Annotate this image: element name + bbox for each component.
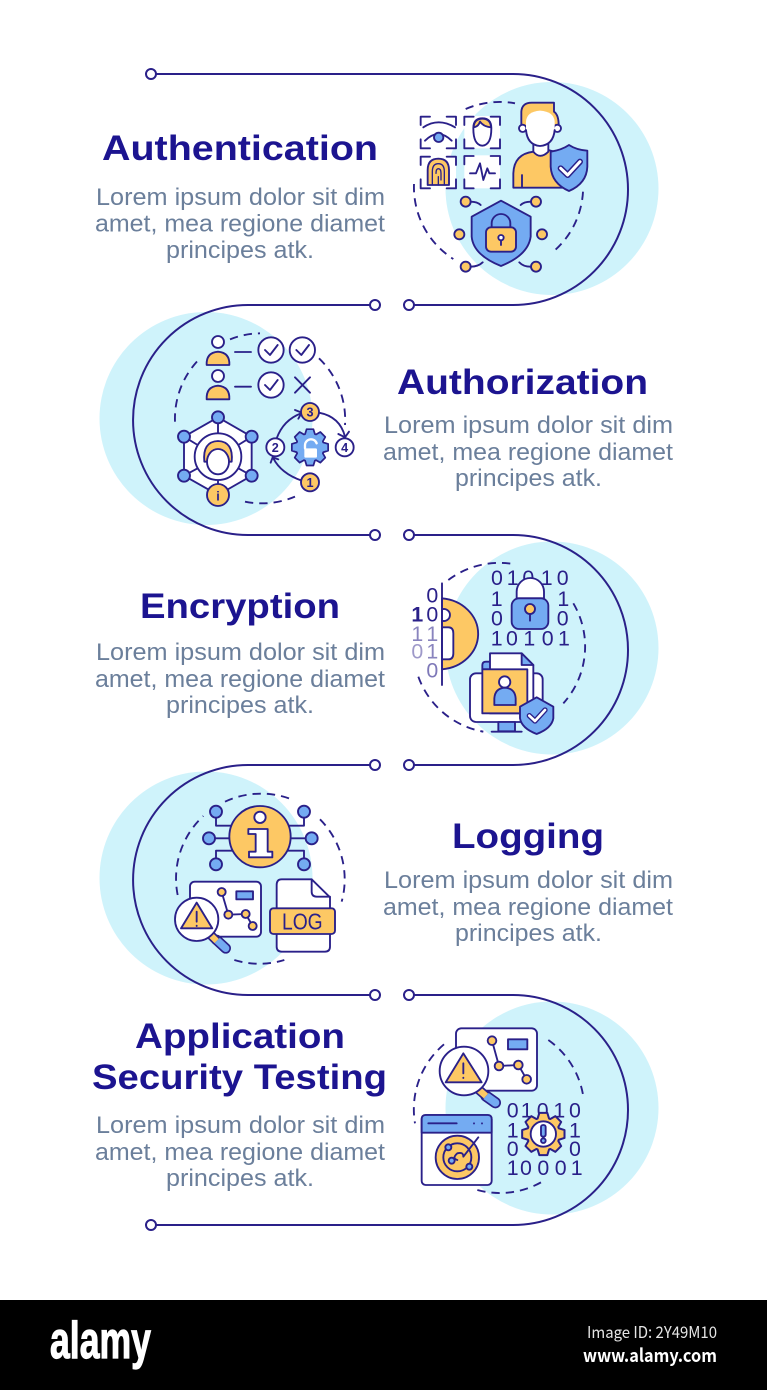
icon: encrypted profile: 1 [558,627,570,651]
step 4: logging [100,760,673,1000]
icon: encrypted profile: 1 [541,566,553,590]
icon: app scanning: 1 [553,1099,565,1123]
icon: encrypted profile: 0 [426,603,438,627]
text block 3: Lorem ipsum dolor sit dim [96,639,385,666]
icon: encrypted profile: 1 [523,627,535,651]
step 5: application security testing [92,990,658,1230]
text block 1: amet, mea regione diamet [95,210,385,238]
end node [146,1220,156,1230]
icon: encrypted profile: 1 [557,587,569,611]
icon: encrypted profile: 1 [411,603,423,627]
icon: app scanning: 0 [569,1137,581,1161]
icon: access rights and hexagon: i [216,490,220,504]
step 3: encryption [95,530,658,770]
icon: access rights and hexagon: 3 [306,406,314,420]
pale circle 1 [446,82,658,295]
pale circle 2 [100,312,312,525]
icon: encrypted profile: 0 [426,658,438,682]
pale circle 4 [100,772,312,984]
connector node 3b [404,760,414,770]
icon: encrypted profile: 0 [542,627,554,651]
text block 2: amet, mea regione diamet [383,439,673,466]
icon: info network and log file [175,794,345,964]
connector 3 [414,535,628,765]
text block 4: principes atk. [455,920,602,947]
icon: encrypted profile: 1 [411,622,423,646]
text block 1: Lorem ipsum dolor sit dim [96,184,385,211]
connector node 4a [370,760,380,770]
connector 2 [133,305,370,535]
connector 1 [156,74,628,305]
step 2: authorization [100,300,673,540]
heading: authorization: Authorization [397,363,648,402]
icon: app scanning: 0 [537,1156,549,1180]
icon: app scanning: 0 [569,1099,581,1123]
icon: app scanning: 0 [507,1137,519,1161]
connector node 4b [370,990,380,1000]
icon: encrypted profile: 0 [411,639,423,663]
icon: encrypted profile: 0 [491,566,503,590]
start node [146,69,156,79]
connector node 2a [370,300,380,310]
icon: app scanning: 0 [507,1099,519,1123]
icon: info network and log file: LOG [282,909,323,935]
icon: encrypted profile: 0 [557,566,569,590]
connector 5 [156,995,628,1225]
heading: application security testing: Application [135,1017,345,1056]
connector node 1 [404,300,414,310]
connector node 3a [404,530,414,540]
heading: logging: Logging [452,817,604,856]
text block 5: Lorem ipsum dolor sit dim [96,1112,385,1139]
footer bar [0,1300,767,1390]
heading: application security testing: Security Testing [92,1058,387,1097]
connector node 5a [404,990,414,1000]
icon: encrypted profile: 1 [507,566,519,590]
connector 4 [133,765,370,995]
icon: encrypted profile [411,563,585,734]
text block 3: amet, mea regione diamet [95,666,385,693]
icon: app scanning [414,1028,583,1193]
text block 4: amet, mea regione diamet [383,894,673,921]
icon: app scanning: 0 [520,1156,532,1180]
icon: encrypted profile: 0 [426,584,438,608]
website: www.alamy.com [583,1342,717,1368]
icon: access rights and hexagon [175,333,354,506]
heading: authentication: Authentication [102,129,378,168]
image id: Image ID: 2Y49M10 [587,1319,717,1343]
step 1: authentication [95,69,658,310]
text block 2: Lorem ipsum dolor sit dim [384,412,673,439]
icon: encrypted profile: 0 [557,607,569,631]
footer logo: alamy [50,1312,151,1370]
icon: encrypted profile: 1 [426,622,438,646]
icon: access rights and hexagon: 2 [272,441,279,455]
icon: encrypted profile: 0 [491,607,503,631]
icon: app scanning: 1 [507,1118,519,1142]
icon: encrypted profile: 1 [426,639,438,663]
text block 1: principes atk. [166,237,314,264]
icon: encrypted profile: 1 [491,587,503,611]
icon: encrypted profile: 0 [522,566,534,590]
icon: app scanning: 1 [569,1118,581,1142]
pale circle 5 [446,1002,658,1214]
text block 3: principes atk. [166,692,314,719]
icon: biometrics and shield [414,102,587,272]
icon: app scanning: 1 [521,1099,533,1123]
text block 5: principes atk. [166,1165,314,1192]
heading: encryption: Encryption [140,587,340,626]
text block 2: principes atk. [455,465,602,492]
icon: app scanning: 0 [537,1099,549,1123]
icon: encrypted profile: 0 [506,627,518,651]
icon: app scanning: 1 [507,1156,519,1180]
icon: app scanning: 1 [571,1156,583,1180]
icon: app scanning: 0 [555,1156,567,1180]
text block 4: Lorem ipsum dolor sit dim [384,867,673,894]
icon: encrypted profile: 1 [491,627,503,651]
connector node 2b [370,530,380,540]
icon: access rights and hexagon: 1 [306,476,314,490]
pale circle 3 [446,542,658,754]
icon: access rights and hexagon: 4 [341,441,348,455]
text block 5: amet, mea regione diamet [95,1139,385,1166]
